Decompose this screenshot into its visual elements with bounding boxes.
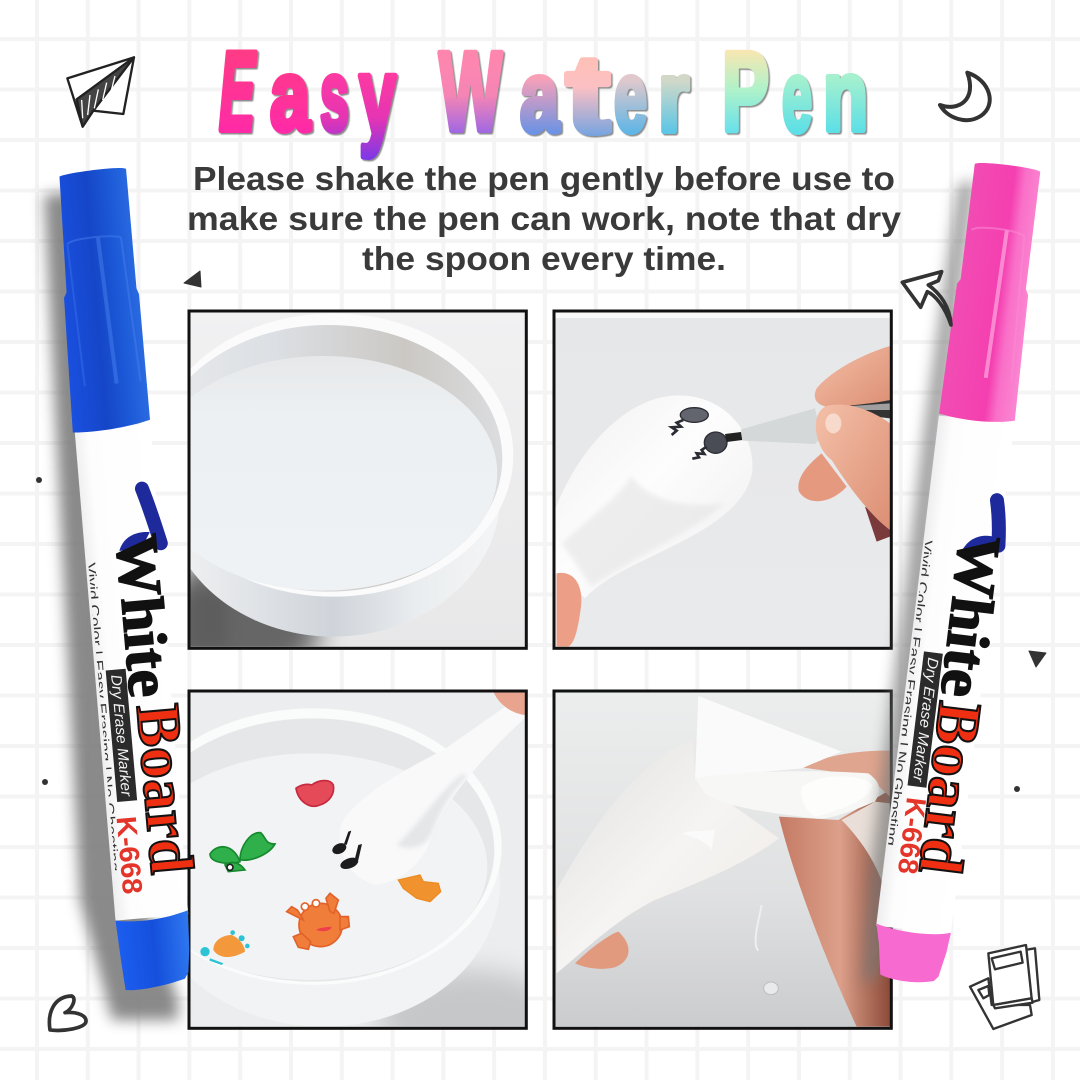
top cap: [939, 160, 1046, 425]
pen label: Board: [905, 698, 994, 878]
subtitle text block: [187, 160, 902, 277]
icon: heart: [49, 996, 86, 1030]
title: E: [219, 29, 257, 154]
panel: floating drawings in bowl: [188, 690, 528, 1030]
icon: books: [970, 945, 1039, 1029]
pen label: K-668: [111, 815, 148, 895]
ink drawing on spoon: [672, 408, 727, 459]
title: n: [823, 40, 868, 152]
pen label: K-668: [892, 796, 932, 876]
pen label: White: [103, 532, 183, 700]
icon: left triangle: [184, 271, 201, 287]
icon: moon: [940, 73, 990, 120]
icon: paper plane: [67, 57, 134, 127]
blue marker pen: [60, 168, 196, 990]
subtitle text block: the spoon every time.: [362, 240, 726, 277]
panel: writing on the spoon: [554, 310, 892, 648]
subtitle text block: Please shake the pen gently before use to: [193, 160, 895, 197]
title: r: [658, 41, 689, 153]
top cap: [50, 167, 151, 433]
pen label: Board: [123, 701, 206, 877]
subtitle text block: make sure the pen can work, note that dry: [187, 200, 902, 237]
drawing: orange shrimp: [398, 875, 441, 902]
title: a: [520, 41, 560, 153]
pen label: Dry Erase Marker: [107, 674, 135, 798]
title: P: [722, 29, 769, 154]
drawing: red fish: [296, 781, 334, 806]
pen label: Vivid Color | Easy Erasing | No Ghosting: [83, 562, 122, 872]
dots: [36, 477, 1020, 792]
pen label: Vivid Color | Easy Erasing | No Ghosting: [883, 539, 936, 847]
title: e: [614, 41, 647, 153]
spoon in water: [404, 707, 524, 798]
pen label: [888, 493, 1006, 874]
pen barrel: [876, 415, 1014, 935]
icon: right triangle: [1029, 651, 1046, 667]
drawing: green dragonfly: [210, 833, 275, 872]
pen label: Dry Erase Marker: [909, 656, 941, 784]
bottom cap: [870, 924, 951, 986]
pen label: White: [928, 531, 1013, 701]
panel: bowl of water: [188, 310, 528, 650]
drawing: black notes: [331, 831, 362, 871]
pen label: [88, 482, 196, 894]
pink marker pen: [876, 163, 1040, 982]
title: a: [270, 40, 311, 152]
pen shadows: [44, 180, 975, 1020]
title: e: [782, 41, 812, 153]
icon: curved arrow: [902, 272, 951, 325]
spoon bowl: [555, 395, 752, 598]
panel: drying the spoon with a tissue: [554, 690, 892, 1028]
title: t: [566, 33, 610, 156]
title: s: [320, 40, 349, 152]
drawing: orange flower: [213, 935, 245, 957]
fingers: [815, 346, 890, 407]
fingers under tissue: [575, 932, 629, 969]
title: [219, 29, 868, 158]
pen barrel: [73, 424, 193, 921]
fingertip: [493, 692, 525, 715]
title: y: [359, 35, 396, 158]
tissue wrapped spoon: [556, 768, 778, 973]
title: W: [439, 29, 502, 154]
drawing: orange crab: [287, 893, 349, 949]
bottom cap: [115, 910, 194, 991]
folded tissue: [695, 696, 842, 778]
water droplet: [764, 982, 778, 995]
pen tip: [725, 432, 742, 442]
